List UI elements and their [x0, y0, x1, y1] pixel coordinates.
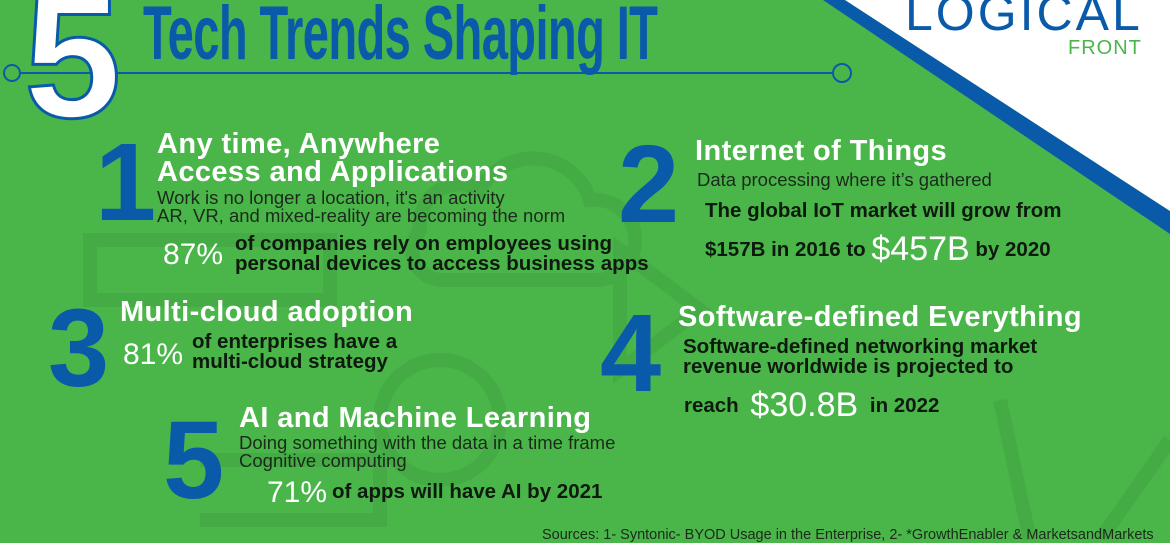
trend 3: multi-cloud strategy — [192, 350, 388, 373]
description 5 — [239, 432, 615, 471]
heading 2: Internet of Things — [695, 135, 947, 167]
trend 3: of enterprises have a — [192, 330, 397, 353]
trend 2 — [618, 123, 1062, 268]
description 2: Data processing where it’s gathered — [697, 169, 992, 190]
description 5: Doing something with the data in a time frame — [239, 432, 615, 453]
description 1 — [157, 187, 565, 226]
number 4: 4 — [600, 292, 661, 415]
trend 5 — [163, 399, 615, 522]
stat SDN market — [683, 335, 1037, 378]
stat SDN market: Software-defined networking market — [683, 335, 1037, 358]
heading 4: Software-defined Everything — [678, 301, 1082, 333]
number 5: 5 — [163, 399, 224, 522]
stat 81%: 81% — [123, 338, 183, 371]
stat SDN market: revenue worldwide is projected to — [683, 355, 1013, 378]
heading 1: Any time, Anywhere — [157, 128, 440, 160]
heading 1: Access and Applications — [157, 156, 508, 188]
stat 87%: 87% — [163, 238, 223, 271]
trend 1: of companies rely on employees using — [235, 232, 612, 255]
trend 2: $157B in 2016 to $457B by 2020 — [705, 230, 1051, 268]
trend 4: reach $30.8B in 2022 — [684, 386, 939, 424]
number 1: 1 — [95, 121, 156, 244]
number 2: 2 — [618, 123, 679, 246]
heading 3: Multi-cloud adoption — [120, 296, 413, 328]
description 5: Cognitive computing — [239, 450, 407, 471]
description 1: AR, VR, and mixed-reality are becoming the norm — [157, 205, 565, 226]
trend 3 — [48, 287, 413, 410]
logo: Logical Front — [905, 0, 1143, 59]
stat 71%: 71% — [267, 476, 327, 509]
heading 1 — [157, 128, 508, 188]
stat IoT market: The global IoT market will grow from — [705, 199, 1062, 222]
number 3: 3 — [48, 287, 109, 410]
trend 1 — [95, 121, 649, 275]
trend 4 — [600, 292, 1082, 424]
sources footnote: Sources: 1- Syntonic- BYOD Usage in the Enterprise, 2- *GrowthEnabler & MarketsandMarkets — [542, 527, 1154, 543]
trend 5: of apps will have AI by 2021 — [332, 480, 602, 503]
header line with circles — [3, 63, 852, 83]
trend 1: personal devices to access business apps — [235, 252, 649, 275]
heading 5: AI and Machine Learning — [239, 402, 591, 434]
description 1: Work is no longer a location, it's an activity — [157, 187, 505, 208]
logo: Logical Front: FRONT — [1068, 37, 1142, 59]
